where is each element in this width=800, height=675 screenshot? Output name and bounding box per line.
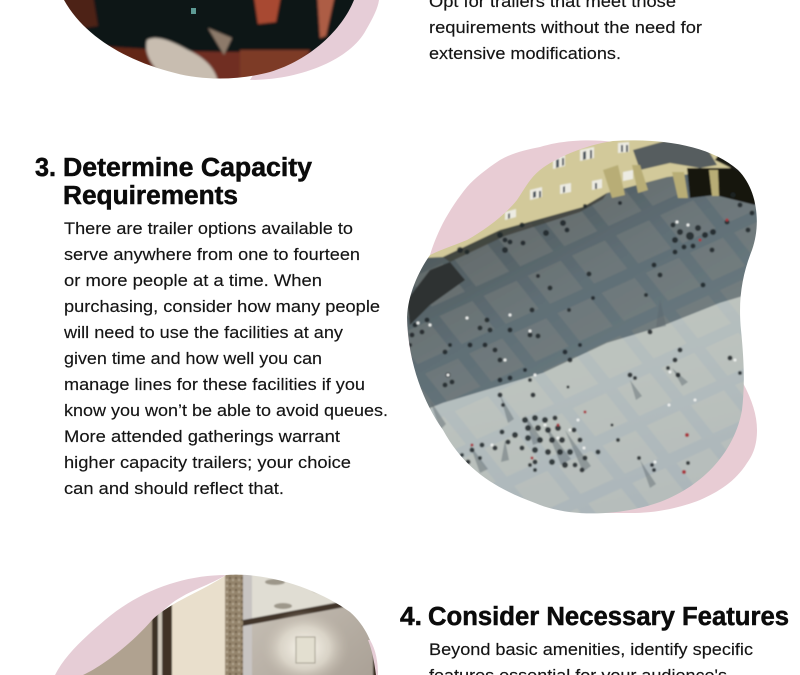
text block: step 4 body: Beyond basic amenities, identify specific [429,640,754,659]
text block: step 3 body [63,219,388,498]
text block: step 2 closing lines: extensive modifications. [429,44,621,63]
illustration: trailer interior photo blob [55,570,382,675]
text block: step 4 body [429,640,754,675]
text block: step 2 closing lines: requirements without the need for [429,18,702,37]
text block: step 3 body: purchasing, consider how many people [64,297,380,316]
text block: step 3 body: More attended gatherings warrant [64,427,340,446]
illustration: plaza crowd aerial photo blob [400,135,770,520]
heading: step 4: Consider Necessary Features [428,603,789,631]
text block: step 3 body: There are trailer options available to [64,219,353,238]
heading: step 3: 3. [35,154,56,182]
illustration: top blob photo of seated crowd [64,0,379,80]
text block: step 3 body: know you won’t be able to avoid queues. [64,401,388,420]
text block: step 3 body: given time and how well you can [64,349,322,368]
heading: step 3: Requirements [63,182,238,210]
text block: step 3 body: higher capacity trailers; your choice [64,453,351,472]
heading: step 4: 4. [400,603,422,631]
text block: step 3 body: or more people at a time. When [64,271,322,290]
text block: step 3 body: serve anywhere from one to fourteen [64,245,360,264]
text block: step 3 body: will need to use the facilities at any [63,323,344,342]
text block: step 3 body: manage lines for these facilities if you [64,375,365,394]
text block: step 2 closing lines [429,0,702,63]
heading: step 3 [35,154,313,210]
heading: step 3: Determine Capacity [63,154,313,182]
text block: step 3 body: can and should reflect that. [64,479,284,498]
